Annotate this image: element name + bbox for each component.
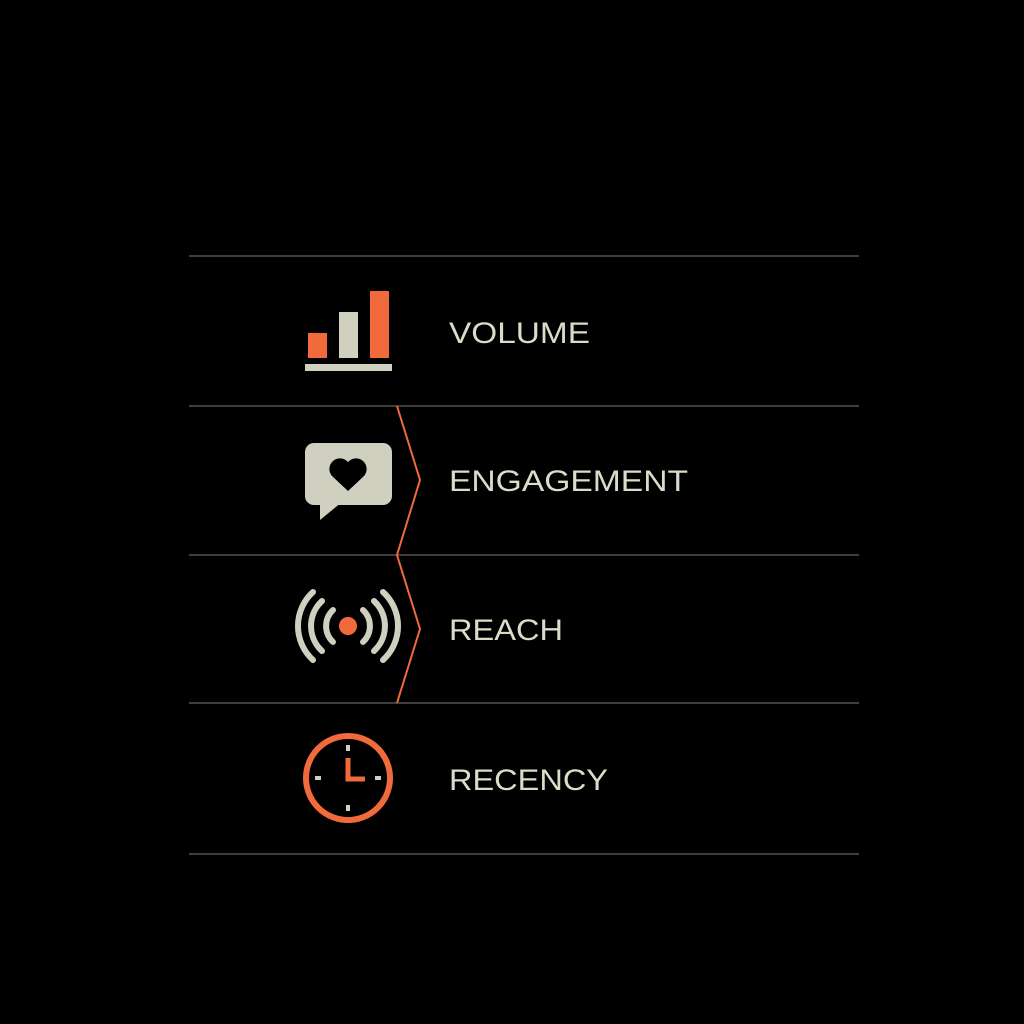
icon: bar chart — [305, 291, 392, 371]
arrow: orange zigzag connector — [397, 406, 420, 703]
icon: speech bubble heart — [305, 443, 392, 520]
label: recency: RECENCY — [449, 764, 608, 797]
icon: clock — [306, 736, 390, 820]
label: engagement: ENGAGEMENT — [449, 465, 688, 498]
label: reach: REACH — [449, 614, 563, 647]
icon: broadcast — [298, 592, 398, 660]
label: volume: VOLUME — [449, 317, 590, 350]
